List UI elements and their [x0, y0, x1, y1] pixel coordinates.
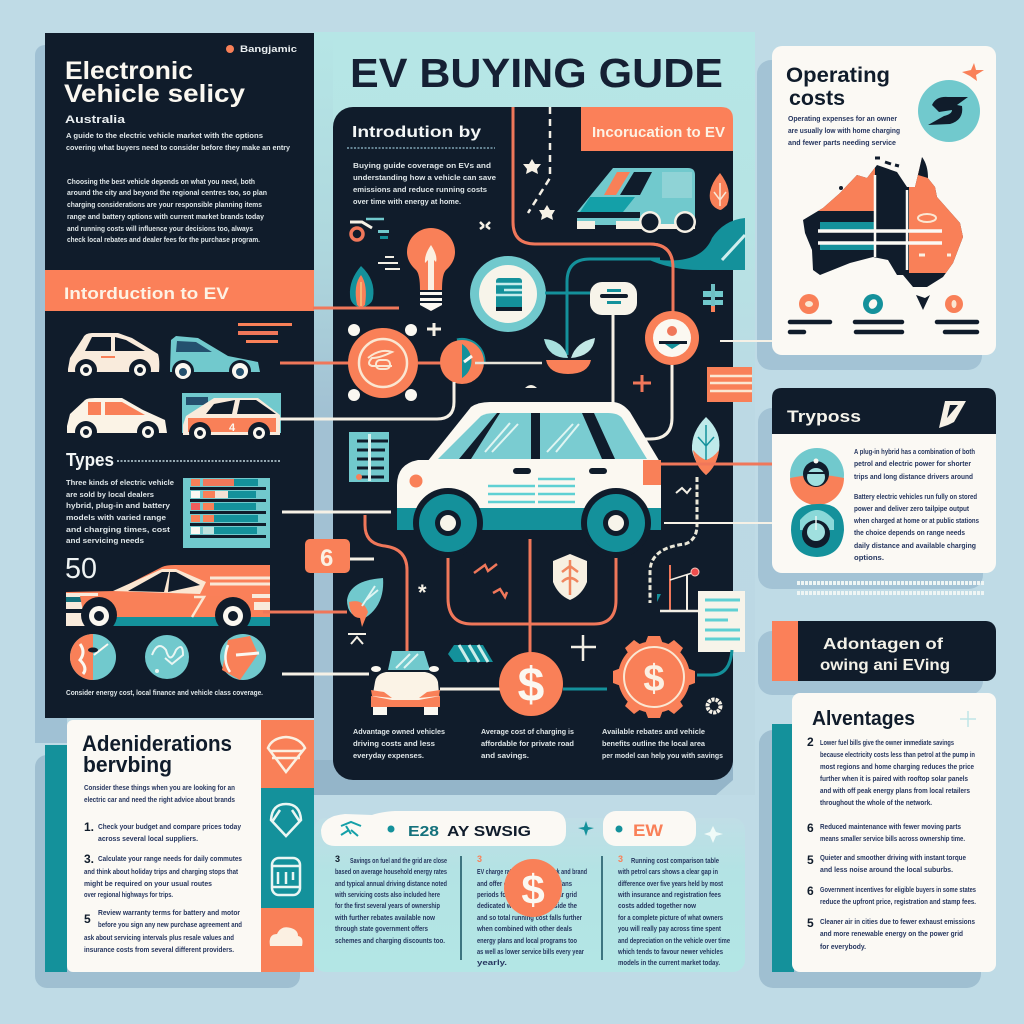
list item one — [820, 738, 975, 807]
icon: white sparkle — [704, 826, 723, 843]
list item five: and more renewable energy on the power grid — [820, 929, 963, 938]
icon: dots and big orange circle — [333, 324, 444, 401]
column one — [334, 854, 447, 945]
icon column — [261, 720, 314, 972]
item one — [98, 822, 242, 843]
panel: considerations before buying — [35, 718, 314, 988]
heading: types: Tryposs — [787, 407, 861, 426]
header bar — [772, 388, 996, 434]
item two: Calculate your range needs for daily commutes — [98, 854, 242, 863]
intro text: understanding how a vehicle can save — [353, 173, 496, 182]
column two — [476, 854, 587, 967]
icon: right leaf — [692, 417, 719, 475]
connector: orange route — [513, 107, 673, 312]
icon: dollar coin: $ — [518, 659, 545, 712]
caption column three — [602, 727, 723, 760]
description: and fewer parts needing service — [788, 138, 896, 147]
body text: charging considerations are your responsible planning items — [67, 200, 262, 209]
icon: dollar coin — [499, 652, 563, 716]
icon: stars — [523, 159, 555, 220]
connector: teal branch — [545, 259, 660, 355]
heading: types: Types — [66, 450, 114, 470]
heading: operating costs: Operating — [786, 64, 890, 87]
band: introduction to EV — [45, 270, 314, 311]
panel: types card — [758, 388, 996, 589]
column three: 3 — [618, 854, 623, 864]
panel: operating costs — [757, 46, 996, 370]
caption column three: Available rebates and vehicle — [602, 727, 705, 736]
icon: large orange car — [66, 565, 270, 633]
icon: pie gauge — [440, 339, 484, 384]
numbered markers: 5 — [807, 916, 814, 930]
intro text: electric car and need the right advice about brands — [84, 795, 235, 804]
column three: for a complete picture of what owners — [618, 913, 723, 922]
list item five — [820, 917, 975, 951]
connector: dashed right curve — [650, 477, 697, 603]
icon: pill node — [590, 282, 637, 315]
swoosh highlight — [722, 235, 745, 260]
intro text: Buying guide coverage on EVs and — [353, 161, 491, 170]
band: introduction to EV: Intorduction to EV — [64, 284, 230, 303]
heading: considerations — [82, 731, 232, 777]
column two: as well as lower service bills every year — [477, 947, 584, 956]
heading: electronic vehicle — [64, 57, 245, 108]
connector stubs from left panel — [263, 308, 334, 674]
connector: cream left curve — [333, 382, 454, 419]
icon: cloud — [270, 927, 302, 946]
icon: zigzag — [676, 488, 691, 493]
chart: Australia map — [800, 155, 970, 310]
panel: advantages list — [759, 693, 996, 988]
types text: Three kinds of electric vehicle — [66, 478, 174, 487]
list item four: Government incentives for eligible buyers in some states — [820, 885, 976, 894]
heading text: owing ani EVing — [820, 657, 950, 674]
column one: through state government offers — [335, 924, 428, 933]
icon: orange teal circle — [220, 634, 266, 680]
caption column one: Advantage owned vehicles — [353, 727, 445, 736]
icon: dollar coin: $ — [521, 866, 545, 913]
numbered markers: 5 — [807, 853, 814, 867]
icon: orange badge: 6 — [320, 545, 333, 572]
text: type two: options. — [854, 553, 884, 562]
panel: left dark column — [35, 33, 314, 743]
markers: 3. — [84, 852, 94, 866]
item two: might be required on your usual routes — [84, 879, 212, 888]
column three — [617, 854, 730, 967]
list item two — [820, 822, 965, 843]
column two: 3 — [477, 854, 482, 864]
column three: costs added together now — [618, 901, 696, 910]
connector: U route — [448, 550, 616, 624]
types text: and charging times, cost — [66, 525, 171, 534]
column two: and so total running cost falls further — [477, 913, 582, 922]
icon: orange and cream hatchback — [67, 398, 167, 443]
column one: and typical annual driving distance noted — [335, 879, 447, 888]
list item one: most regions and home charging reduces the price — [820, 762, 974, 771]
column three: with petrol cars shows a clear gap in — [617, 867, 718, 876]
description: are usually low with home charging — [788, 126, 900, 135]
column two: yearly. — [477, 958, 507, 967]
pill: savings heading — [321, 811, 566, 846]
types text: hybrid, plug-in and battery — [66, 501, 171, 510]
icon: hatched strip — [448, 645, 493, 662]
item three — [84, 908, 242, 954]
icon: orange circle node — [645, 311, 699, 365]
icon: van — [577, 168, 696, 233]
connector: cream right-side curve — [640, 365, 672, 439]
icon: multicolour leaf — [350, 266, 374, 308]
numbered markers — [807, 735, 814, 930]
list item two: Reduced maintenance with fewer moving parts — [820, 822, 961, 831]
caption column one: everyday expenses. — [353, 751, 424, 760]
item two: over regional highways for trips. — [84, 890, 173, 899]
icon: split circle — [70, 634, 116, 680]
intro text — [353, 161, 496, 206]
body text — [67, 177, 267, 244]
item three: before you sign any new purchase agreement and — [98, 920, 242, 929]
icon: cream hatchback — [68, 333, 159, 381]
types text: models with varied range — [66, 513, 166, 522]
list item three: Quieter and smoother driving with instant torque — [820, 853, 966, 862]
icon: dashes — [378, 257, 400, 269]
heading: considerations: bervbing — [83, 752, 172, 777]
text: type two — [853, 492, 979, 562]
text: type two: power and deliver zero tailpipe output — [854, 504, 969, 513]
connectors reaching right cards — [661, 341, 772, 523]
list item one: Lower fuel bills give the owner immediate savings — [820, 738, 954, 747]
types text: are sold by local dealers — [66, 490, 154, 499]
column three: difference over five years held by most — [618, 879, 723, 888]
text: type one — [854, 447, 975, 481]
chart: type comparison table — [183, 478, 270, 548]
item three: insurance costs from several different providers. — [84, 945, 234, 954]
intro text — [84, 783, 235, 804]
list item three — [820, 853, 966, 874]
icon: plus cross — [427, 323, 441, 336]
caption column two: affordable for private road — [481, 739, 574, 748]
icon: dollar coin — [504, 859, 562, 917]
list item five: for everybody. — [820, 942, 866, 951]
panel: savings — [314, 811, 745, 972]
heading: operating costs: costs — [789, 87, 845, 110]
connector: cream left low line — [333, 672, 369, 676]
icon: small ring — [708, 700, 720, 712]
description: Operating expenses for an owner — [788, 114, 897, 123]
list item four: reduce the upfront price, registration and stamp fees. — [820, 897, 976, 906]
column one: with further rebates available now — [334, 913, 435, 922]
icon: tiny symbol — [348, 634, 366, 644]
title: EV BUYING GUDE — [350, 50, 723, 96]
legend: three keys — [790, 294, 977, 332]
icon: small gadget — [350, 219, 389, 240]
heading: operating costs — [786, 64, 890, 110]
body text: check local rebates and dealer fees for the purchase program. — [67, 235, 260, 244]
numbered markers: 6 — [807, 821, 814, 835]
pill: EV label: EW — [633, 821, 664, 840]
icon: document — [698, 591, 745, 652]
numbered markers: 6 — [807, 884, 814, 898]
caption column two: Average cost of charging is — [481, 727, 574, 736]
icon: teal circle node — [470, 256, 546, 332]
tab: introduction to EV — [581, 107, 733, 151]
heading text: Adontagen of — [823, 636, 944, 653]
icon: teal circle — [145, 635, 189, 679]
heading: electronic vehicle: Electronic — [65, 57, 193, 85]
left mint strip — [314, 32, 333, 795]
icon: circle shield — [271, 804, 301, 836]
icon: orange leaf — [710, 173, 729, 210]
icon: left leaf — [347, 578, 383, 627]
number: 50: 50 — [65, 553, 97, 585]
connector: cream down line — [612, 315, 614, 404]
text: type two: the choice depends on range needs — [854, 528, 965, 537]
intro text: Consider these things when you are looking for an — [84, 783, 235, 792]
column two: EV charge rates vary by network and brand — [477, 867, 587, 876]
body text: Choosing the best vehicle depends on what you need, both — [67, 177, 255, 186]
text: type two: daily distance and available charging — [854, 541, 976, 550]
big car — [397, 402, 663, 558]
item three: Review warranty terms for battery and motor — [98, 908, 240, 917]
column two: energy plans and local programs too — [477, 936, 577, 945]
caption: Consider energy cost, local finance and vehicle class coverage. — [66, 688, 263, 697]
caption column three: benefits outline the local area — [602, 739, 706, 748]
heading: introduction by: Introdution by — [352, 124, 481, 141]
column one: with servicing costs also included here — [334, 890, 440, 899]
caption column one: driving costs and less — [353, 739, 435, 748]
panel: centre dark diagram — [305, 107, 752, 780]
list item one: and with off peak energy plans from local retailers — [820, 786, 970, 795]
icon: white plus — [571, 635, 596, 661]
tab: introduction to EV: Incorucation to EV — [592, 124, 725, 141]
heading: electronic vehicle: Vehicle selicy — [64, 80, 245, 108]
connector: teal money line — [563, 688, 607, 690]
teal swoosh — [645, 218, 745, 270]
item one: Check your budget and compare prices today — [98, 822, 242, 831]
intro text: emissions and reduce running costs — [353, 185, 487, 194]
icon: top type circle — [790, 448, 844, 505]
column two: periods for homes with a solar grid — [477, 890, 577, 899]
connector: cream car line — [440, 688, 500, 690]
column three: and depreciation on the vehicle over time — [618, 936, 730, 945]
list item one: because electricity costs less than petrol at the pump in — [820, 750, 975, 759]
list item four — [820, 885, 976, 906]
list item one: throughout the whole of the network. — [820, 798, 932, 807]
icon: zigzags — [474, 564, 507, 597]
column one: schemes and charging discounts too. — [335, 936, 445, 945]
tag: category label — [226, 44, 297, 54]
icon: teal sports car — [170, 336, 260, 382]
text: type one: petrol and electric power for shorter — [854, 459, 971, 468]
icon: plant bowl — [544, 338, 595, 374]
text: type one: A plug-in hybrid has a combination of both — [854, 447, 975, 456]
icon: pale plus — [960, 711, 976, 727]
icon: teal arrow circle — [918, 80, 980, 142]
centre mint backdrop — [333, 32, 755, 795]
connector: orange route overlay — [650, 244, 673, 312]
list item five: Cleaner air in cities due to fewer exhaust emissions — [820, 917, 975, 926]
icon: teal tool — [703, 284, 723, 312]
intro text — [66, 131, 291, 152]
markers — [84, 820, 94, 926]
icon: teal card car — [182, 393, 281, 444]
body text: range and battery options with current market brands today — [67, 212, 265, 221]
icon: plus — [633, 375, 651, 392]
icon: lower type circle — [791, 504, 844, 557]
column three: which tends to favour newer vehicles — [617, 947, 723, 956]
text: type two: Battery electric vehicles run fully on stored — [854, 492, 977, 501]
icon: tiny cross — [480, 222, 490, 229]
column two: and offer cheaper overnight plans — [477, 879, 572, 888]
connector: teal gear line — [697, 650, 732, 675]
divider — [461, 856, 602, 960]
icon: bookmark pencil — [939, 401, 966, 428]
icon: rounded chart — [272, 858, 300, 895]
connector: cream left stub — [333, 510, 391, 514]
item two: and think about holiday trips and charging stops that — [84, 867, 238, 876]
tag: category label: Bangjamic — [240, 44, 297, 54]
types text — [66, 478, 174, 545]
icon: lightbulb — [407, 228, 455, 311]
icon: teal document — [349, 432, 389, 482]
column three: with insurance and registration fees — [617, 890, 721, 899]
intro text: covering what buyers need to consider before they make an entry — [66, 143, 291, 152]
decorative strip lines — [797, 583, 984, 593]
list item three: and less noise around the local suburbs. — [820, 865, 953, 874]
types text: and servicing needs — [66, 536, 144, 545]
item three: ask about servicing intervals plus resale values and — [84, 933, 234, 942]
panel: advantages banner — [758, 621, 996, 695]
description — [788, 114, 900, 147]
icon: orange star — [962, 63, 984, 81]
column one: for the first several years of ownership — [335, 901, 440, 910]
connector: cream badge line — [350, 558, 374, 560]
icon: front view car — [371, 651, 440, 715]
icon: diamond — [268, 737, 305, 772]
column two: dedicated wall box fitted inside the — [477, 901, 577, 910]
caption column two — [481, 727, 574, 760]
connector: dashed trail — [528, 107, 550, 213]
pill: savings heading: E28 — [408, 823, 439, 840]
column one: 3 — [335, 854, 340, 864]
intro text: over time with energy at home. — [353, 197, 461, 206]
icon: tiny umbrella — [525, 385, 537, 388]
pill: savings heading: AY SWSIG — [447, 823, 531, 840]
connector: centre orange stem — [528, 539, 532, 654]
heading text — [820, 636, 950, 674]
centre panel drop shadow — [314, 760, 733, 795]
icon: dollar gear — [613, 636, 695, 718]
icon: dollar gear: $ — [643, 658, 665, 700]
list item one: further when it is paired with rooftop solar panels — [820, 774, 968, 783]
icon: teal card car: 4 — [229, 422, 236, 434]
icon: star: * — [418, 580, 427, 605]
icon: orange note — [707, 367, 752, 402]
markers: 5 — [84, 912, 91, 926]
heading: advantages: Alventages — [812, 708, 915, 730]
icon: shield — [553, 554, 587, 600]
pill: EV label — [603, 811, 696, 846]
intro text: A guide to the electric vehicle market with the options — [66, 131, 263, 140]
connector: orange left stub — [333, 610, 347, 614]
column three: models in the current market today. — [618, 958, 720, 967]
column three: you will really pay across time spent — [618, 924, 721, 933]
caption column one — [353, 727, 445, 760]
body text: around the city and beyond the regional centres too, so plan — [67, 188, 267, 197]
connector: orange curve — [365, 515, 407, 652]
list item two: means smaller service bills across ownership time. — [820, 834, 965, 843]
icon: note — [238, 323, 292, 343]
connector: cream gauge line — [475, 362, 542, 364]
text: type one: trips and long distance drivers around — [854, 472, 973, 481]
markers: 1. — [84, 820, 94, 834]
icon: teal sparkle — [578, 821, 594, 836]
text: type two: when charged at home or at public stations — [853, 516, 979, 525]
column one: Savings on fuel and the grid are close — [350, 856, 447, 865]
connector: orange shelf — [333, 306, 399, 310]
subheading: Australia: Australia — [65, 114, 126, 126]
column one: based on average household energy rates — [335, 867, 447, 876]
column two: when combined with other deals — [476, 924, 572, 933]
item two — [84, 854, 242, 899]
numbered markers: 2 — [807, 735, 814, 749]
icon: orange badge — [305, 539, 350, 573]
column three: Running cost comparison table — [631, 856, 719, 865]
dotted rule — [347, 147, 495, 149]
dotted rule — [117, 460, 280, 462]
body text: and running costs will influence your decisions too, always — [67, 224, 253, 233]
heading: considerations: Adeniderations — [82, 731, 232, 756]
icon: mini chart — [657, 565, 702, 611]
caption column two: and savings. — [481, 751, 529, 760]
caption column three: per model can help you with savings — [602, 751, 723, 760]
item one: across several local suppliers. — [98, 834, 198, 843]
